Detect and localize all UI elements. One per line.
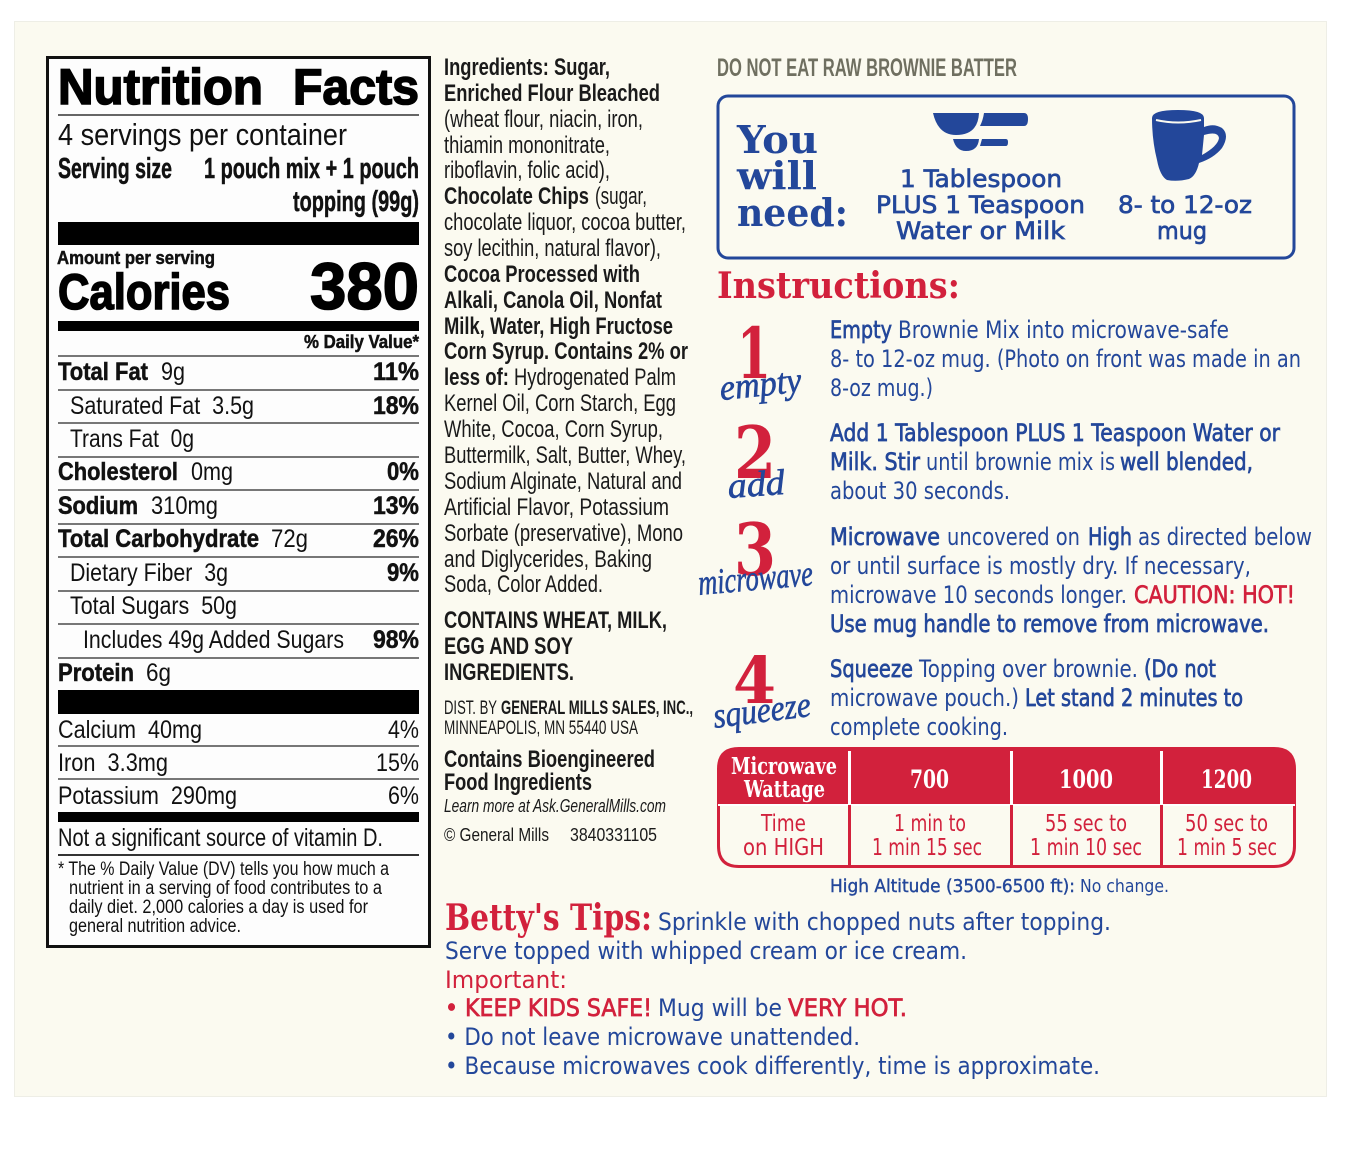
table header: Wattage [743, 776, 825, 803]
text block: bioengineered notice [444, 746, 666, 816]
text block: ingredients: Sodium Alginate, Natural and [444, 468, 682, 495]
nutrient rows: 18% [373, 392, 419, 420]
text block: allergens: CONTAINS WHEAT, MILK, [444, 607, 667, 634]
vitamin and mineral rows: 4% [388, 716, 419, 744]
calories: 380 [310, 249, 419, 323]
step 4: Topping over brownie. [918, 655, 1138, 683]
step 1: Empty [830, 316, 892, 344]
table: microwave wattage times [717, 747, 1296, 866]
serving information [58, 117, 419, 218]
step 1 [718, 312, 1301, 408]
step 2: Add 1 Tablespoon PLUS 1 Teaspoon Water or [830, 419, 1280, 447]
text block: distributor: MINNEAPOLIS, MN 55440 USA [444, 718, 638, 739]
text block: ingredients: Buttermilk, Salt, Butter, Whey, [444, 442, 686, 469]
nutrient rows [58, 358, 419, 687]
text block: copyright: 3840331105 [570, 825, 657, 845]
nutrient rows: 11% [373, 358, 419, 386]
heading: you will need [736, 117, 848, 235]
heading: you will need: You [736, 117, 818, 162]
step 3: microwave 10 seconds longer. [830, 581, 1127, 609]
table header: 1000 [1059, 765, 1113, 794]
nutrient rows: Saturated Fat 3.5g [70, 392, 254, 420]
nutrient rows: 6g [146, 659, 171, 687]
text block: ingredients: (sugar, [595, 183, 647, 210]
nutrient rows: 13% [373, 492, 419, 520]
nutrient rows: Protein [58, 659, 134, 687]
text block: ingredients: Alkali, Canola Oil, Nonfat [444, 287, 662, 314]
table times: Time [760, 811, 806, 837]
panel: betty's tips: Serve topped with whipped cream or ice cream. [445, 937, 967, 965]
step 3: uncovered on [947, 523, 1080, 551]
step 1: 8-oz mug.) [830, 374, 933, 402]
table times: 1 min to [894, 811, 966, 837]
step 3: 3 [734, 507, 776, 592]
label: water or milk: Water or Milk [896, 217, 1065, 245]
vitamin and mineral rows: 15% [376, 749, 419, 777]
table times: 1 min 5 sec [1177, 835, 1277, 861]
nutrient rows: 9g [161, 358, 185, 386]
text block: ingredients: (wheat flour, niacin, iron, [444, 106, 643, 133]
panel: betty's tips [445, 897, 1111, 1080]
text block: ingredients [444, 54, 688, 598]
serving information: 1 pouch mix + 1 pouch [204, 153, 419, 185]
table header: 700 [910, 765, 949, 794]
nutrient rows: 9% [387, 559, 419, 587]
vitamin D note: Not a significant source of vitamin D. [58, 824, 383, 852]
panel: nutrition facts [48, 58, 430, 946]
step 3: microwave [696, 553, 814, 603]
vitamin and mineral rows: Calcium 40mg [58, 716, 202, 744]
table times [743, 811, 1277, 861]
nutrient rows: 0mg [191, 458, 233, 486]
step 3: or until surface is mostly dry. If necessary, [830, 552, 1251, 580]
text block: copyright [444, 825, 657, 845]
text block: ingredients: thiamin mononitrate, [444, 132, 610, 159]
step 2: Milk. Stir [830, 448, 920, 476]
panel: betty's tips: Mug will be [658, 994, 782, 1022]
text block: ingredients: chocolate liquor, cocoa butter, [444, 209, 686, 236]
label: mug size: 8- to 12-oz [1118, 191, 1252, 219]
text block: ingredients: Milk, Water, High Fructose [444, 313, 673, 340]
nutrient rows: 72g [271, 525, 308, 553]
high altitude note: High Altitude (3500-6500 ft): [830, 876, 1075, 897]
heading: you will need: need: [737, 190, 848, 235]
serving information: Serving size [58, 153, 172, 185]
label: water or milk: PLUS 1 Teaspoon [876, 191, 1085, 219]
text block: ingredients: White, Cocoa, Corn Syrup, [444, 416, 663, 443]
footnote: daily diet. 2,000 calories a day is used for [69, 897, 369, 918]
step 4: 4 [733, 643, 776, 719]
calories [57, 248, 419, 323]
nutrient rows: Total Fat [58, 358, 149, 386]
panel: betty's tips: VERY HOT. [788, 994, 907, 1022]
text block: allergens: EGG AND SOY [444, 633, 573, 660]
nutrient rows: Dietary Fiber 3g [70, 559, 228, 587]
text block: ingredients: Chocolate Chips [444, 183, 589, 210]
warning heading: DO NOT EAT RAW BROWNIE BATTER [717, 54, 1017, 82]
heading: betty's tips: Betty's Tips: [445, 897, 652, 939]
nutrient rows: Total Sugars 50g [70, 592, 237, 620]
table header: Microwave [731, 753, 837, 780]
label: mug size [1118, 191, 1252, 245]
step 1: empty [718, 360, 803, 408]
nutrient rows: 310mg [151, 492, 218, 520]
step 4: Let stand 2 minutes to [1025, 684, 1243, 712]
nutrient rows: Total Carbohydrate [58, 525, 259, 553]
serving information: topping (99g) [293, 186, 419, 218]
nutrient rows: Sodium [58, 492, 138, 520]
text block: bioengineered notice: Learn more at Ask.GeneralMills.com [444, 796, 666, 816]
label: water or milk: 1 Tablespoon [900, 165, 1062, 193]
panel: you will need [718, 96, 1294, 258]
text block: ingredients: Kernel Oil, Corn Starch, Egg [444, 390, 676, 417]
heading: nutrition facts: Facts [293, 59, 419, 115]
table header [731, 753, 1252, 803]
step 3: as directed below [1138, 523, 1312, 551]
text block: ingredients: Ingredients: Sugar, [444, 54, 610, 81]
panel: betty's tips: • Because microwaves cook differently, time is approximate. [445, 1052, 1100, 1080]
footnote [58, 859, 389, 937]
table times: 55 sec to [1045, 811, 1127, 837]
table times: on HIGH [743, 835, 824, 861]
panel: betty's tips: Important: [445, 966, 567, 994]
text block: ingredients: riboflavin, folic acid), [444, 157, 610, 184]
step 3: CAUTION: HOT! [1134, 581, 1295, 609]
table times: 1 min 15 sec [872, 835, 982, 861]
calories: Amount per serving [57, 248, 215, 268]
vitamin and mineral rows [58, 716, 419, 810]
nutrient rows: 0% [387, 458, 419, 486]
step 4: squeeze [711, 684, 813, 736]
footnote: * The % Daily Value (DV) tells you how much a [58, 859, 389, 880]
heading: instructions: Instructions: [717, 265, 960, 307]
calories: Calories [58, 264, 230, 320]
icon: mug [1152, 110, 1226, 181]
step 4: complete cooking. [830, 713, 1008, 741]
nutrient rows: 26% [373, 525, 419, 553]
table header: 1200 [1201, 765, 1252, 794]
step 2: about 30 seconds. [830, 477, 1010, 505]
step 1: Brownie Mix into microwave-safe [898, 316, 1229, 344]
step 3: Microwave [830, 523, 940, 551]
text block: bioengineered notice: Contains Bioengineered [444, 746, 655, 773]
step 2: add [726, 462, 787, 506]
text block: ingredients: Hydrogenated Palm [514, 364, 676, 391]
text block: ingredients: Artificial Flavor, Potassium [444, 494, 669, 521]
text block: distributor: DIST. BY [444, 698, 497, 719]
text block: allergens: INGREDIENTS. [444, 659, 574, 686]
step 2: well blended, [1120, 448, 1253, 476]
text block: allergens [444, 607, 667, 686]
heading: you will need: will [736, 153, 817, 198]
step 1: 1 [737, 312, 771, 395]
nutrient rows: Includes 49g Added Sugars [83, 626, 344, 654]
table times: 50 sec to [1185, 811, 1268, 837]
text block: ingredients: Corn Syrup. Contains 2% or [444, 338, 688, 365]
step 2 [726, 410, 1280, 506]
footnote: general nutrition advice. [69, 916, 241, 937]
step 2: 2 [734, 410, 776, 495]
text block: bioengineered notice: Food Ingredients [444, 769, 592, 796]
label: mug size: mug [1157, 217, 1207, 245]
daily value header: % Daily Value* [304, 332, 419, 352]
text block: ingredients: Cocoa Processed with [444, 261, 640, 288]
text block: ingredients: Enriched Flour Bleached [444, 80, 660, 107]
nutrient rows: Cholesterol [58, 458, 178, 486]
nutrient rows: 98% [373, 626, 419, 654]
panel: betty's tips: Sprinkle with chopped nuts after topping. [658, 908, 1111, 936]
step 4: Squeeze [830, 655, 913, 683]
footnote: nutrient in a serving of food contributes to a [69, 878, 382, 899]
step 2: until brownie mix is [926, 448, 1115, 476]
text block: ingredients: Soda, Color Added. [444, 571, 603, 598]
text block: ingredients: Sorbate (preservative), Mono [444, 520, 683, 547]
vitamin and mineral rows: 6% [388, 782, 419, 810]
text block: ingredients: less of: [444, 364, 509, 391]
table times: 1 min 10 sec [1030, 835, 1142, 861]
label: water or milk [876, 165, 1085, 245]
nutrient rows: Trans Fat 0g [70, 425, 194, 453]
text block: distributor [444, 698, 693, 739]
vitamin and mineral rows: Iron 3.3mg [58, 749, 168, 777]
text block: distributor: GENERAL MILLS SALES, INC., [501, 698, 693, 719]
step 3 [696, 507, 1312, 638]
icon: measuring spoons [933, 113, 1028, 151]
step 4 [711, 643, 1243, 741]
step 4: microwave pouch.) [830, 684, 1019, 712]
step 4: (Do not [1144, 655, 1216, 683]
panel: betty's tips: • Do not leave microwave unattended. [445, 1023, 860, 1051]
high altitude note: No change. [1080, 876, 1169, 897]
vitamin and mineral rows: Potassium 290mg [58, 782, 237, 810]
serving information: 4 servings per container [58, 117, 347, 152]
text block: ingredients: and Diglycerides, Baking [444, 546, 652, 573]
text block: copyright: © General Mills [444, 825, 549, 845]
text block: ingredients: soy lecithin, natural flavor), [444, 235, 661, 262]
heading: nutrition facts: Nutrition [58, 59, 263, 115]
panel: betty's tips: • KEEP KIDS SAFE! [445, 994, 652, 1022]
step 3: Use mug handle to remove from microwave. [830, 610, 1269, 638]
heading: nutrition facts [58, 59, 419, 115]
step 3: High [1088, 523, 1132, 551]
